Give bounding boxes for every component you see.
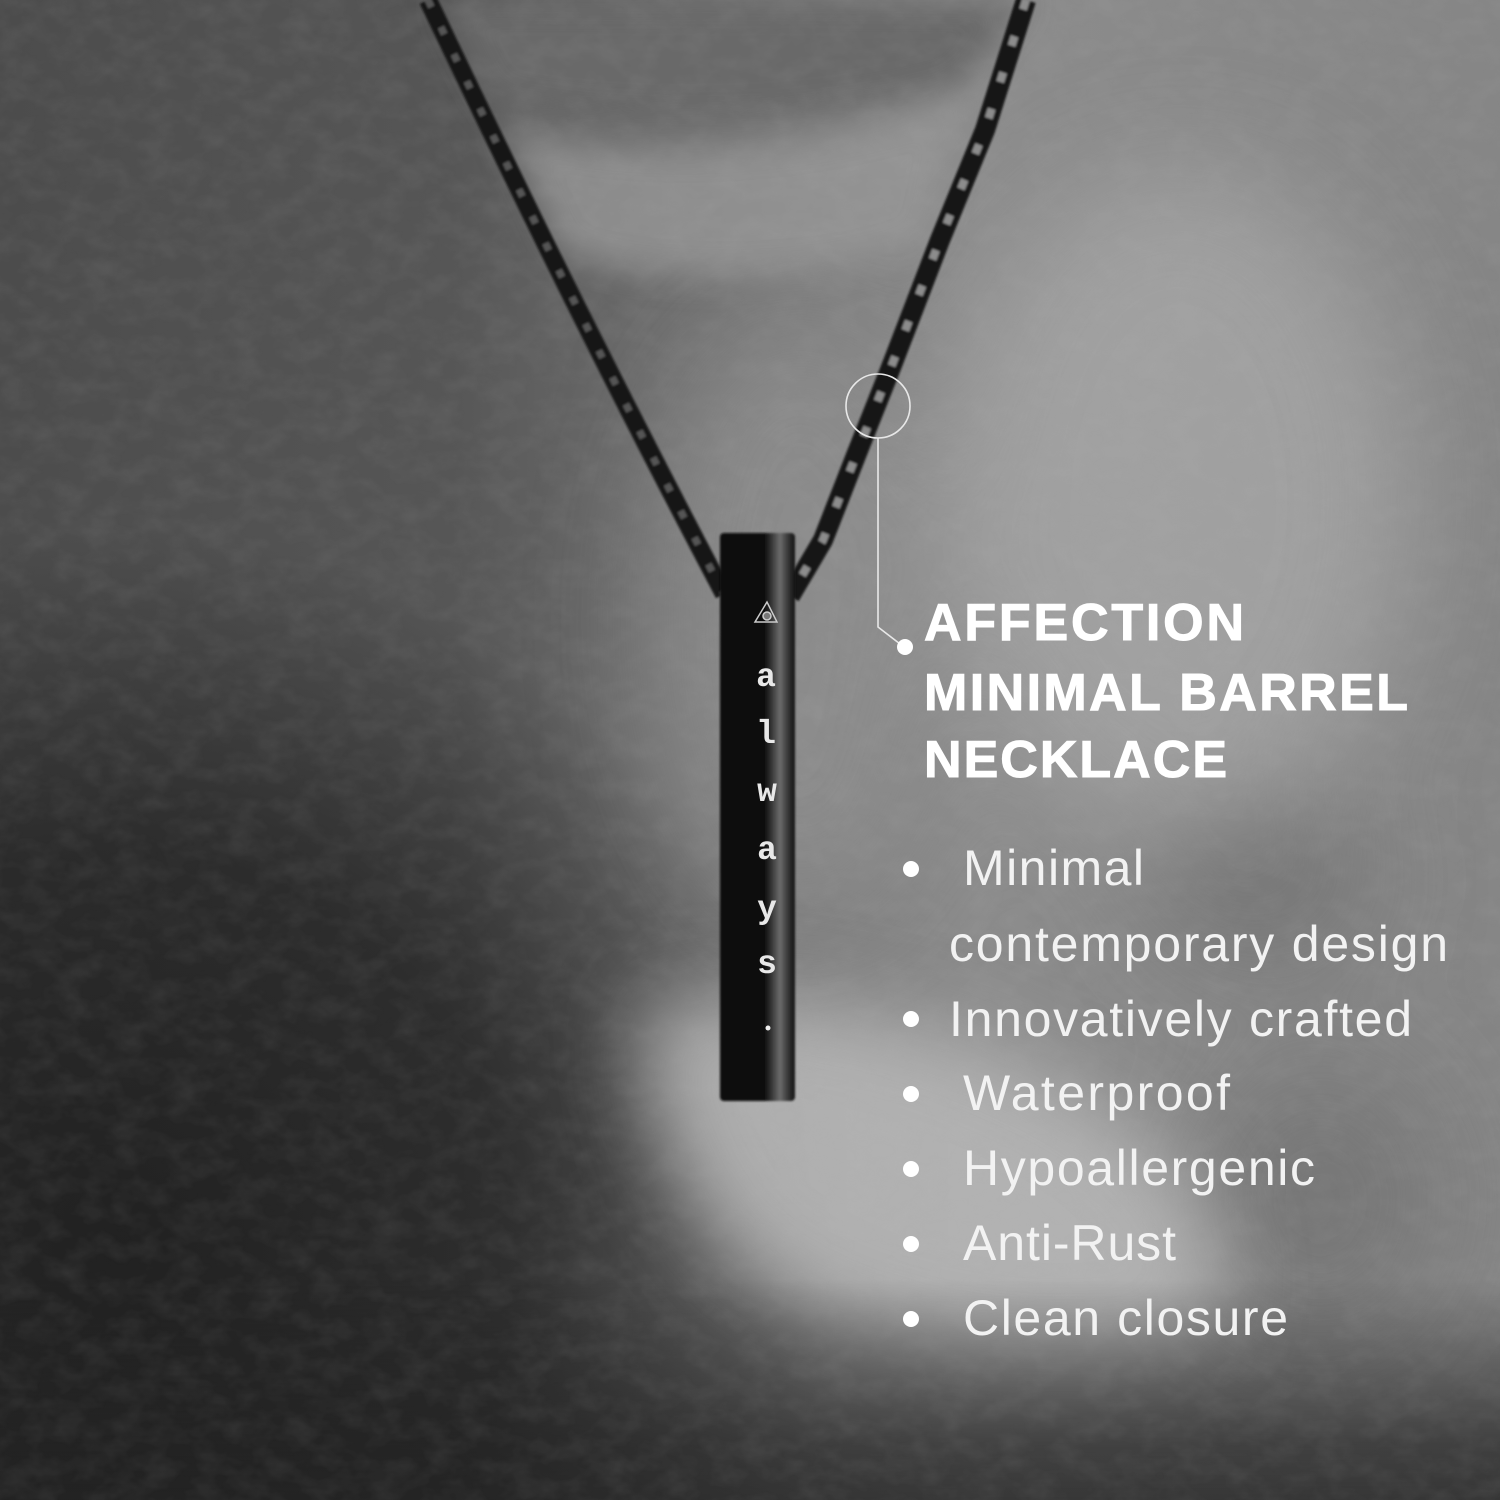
engraved word: always.: w [757,774,777,811]
engraved word: always.: a [757,832,777,869]
engraved word: always.: l [756,716,776,753]
pendant: black barrel [720,533,795,1101]
heading: product title: MINIMAL BARREL [924,664,1408,722]
list item: minimal contemporary design [903,840,1448,972]
chain: right strand [790,0,1026,596]
heading: product title: AFFECTION [924,594,1244,652]
heading: product title: NECKLACE [924,731,1227,789]
list item: hypoallergenic: Hypoallergenic [963,1140,1315,1196]
list item: innovatively crafted: Innovatively crafted [949,991,1412,1047]
list item: anti-rust: Anti-Rust [963,1215,1176,1271]
list item: clean closure: Clean closure [963,1290,1288,1346]
engraved word: always.: a [756,659,776,696]
feature list [903,840,1448,1346]
list item: minimal contemporary design: contemporary design [949,916,1448,972]
engraved word: always.: y [757,891,777,928]
engraved word: always. [756,659,777,1030]
callout: circle with leader line [846,374,913,655]
list item: minimal contemporary design: Minimal [963,840,1144,896]
list item: waterproof: Waterproof [963,1065,1230,1121]
heading: product title [924,594,1408,789]
chain: left strand [428,0,724,594]
engraved word: always.: s [757,946,777,983]
icon: engraved triangle [755,602,777,622]
